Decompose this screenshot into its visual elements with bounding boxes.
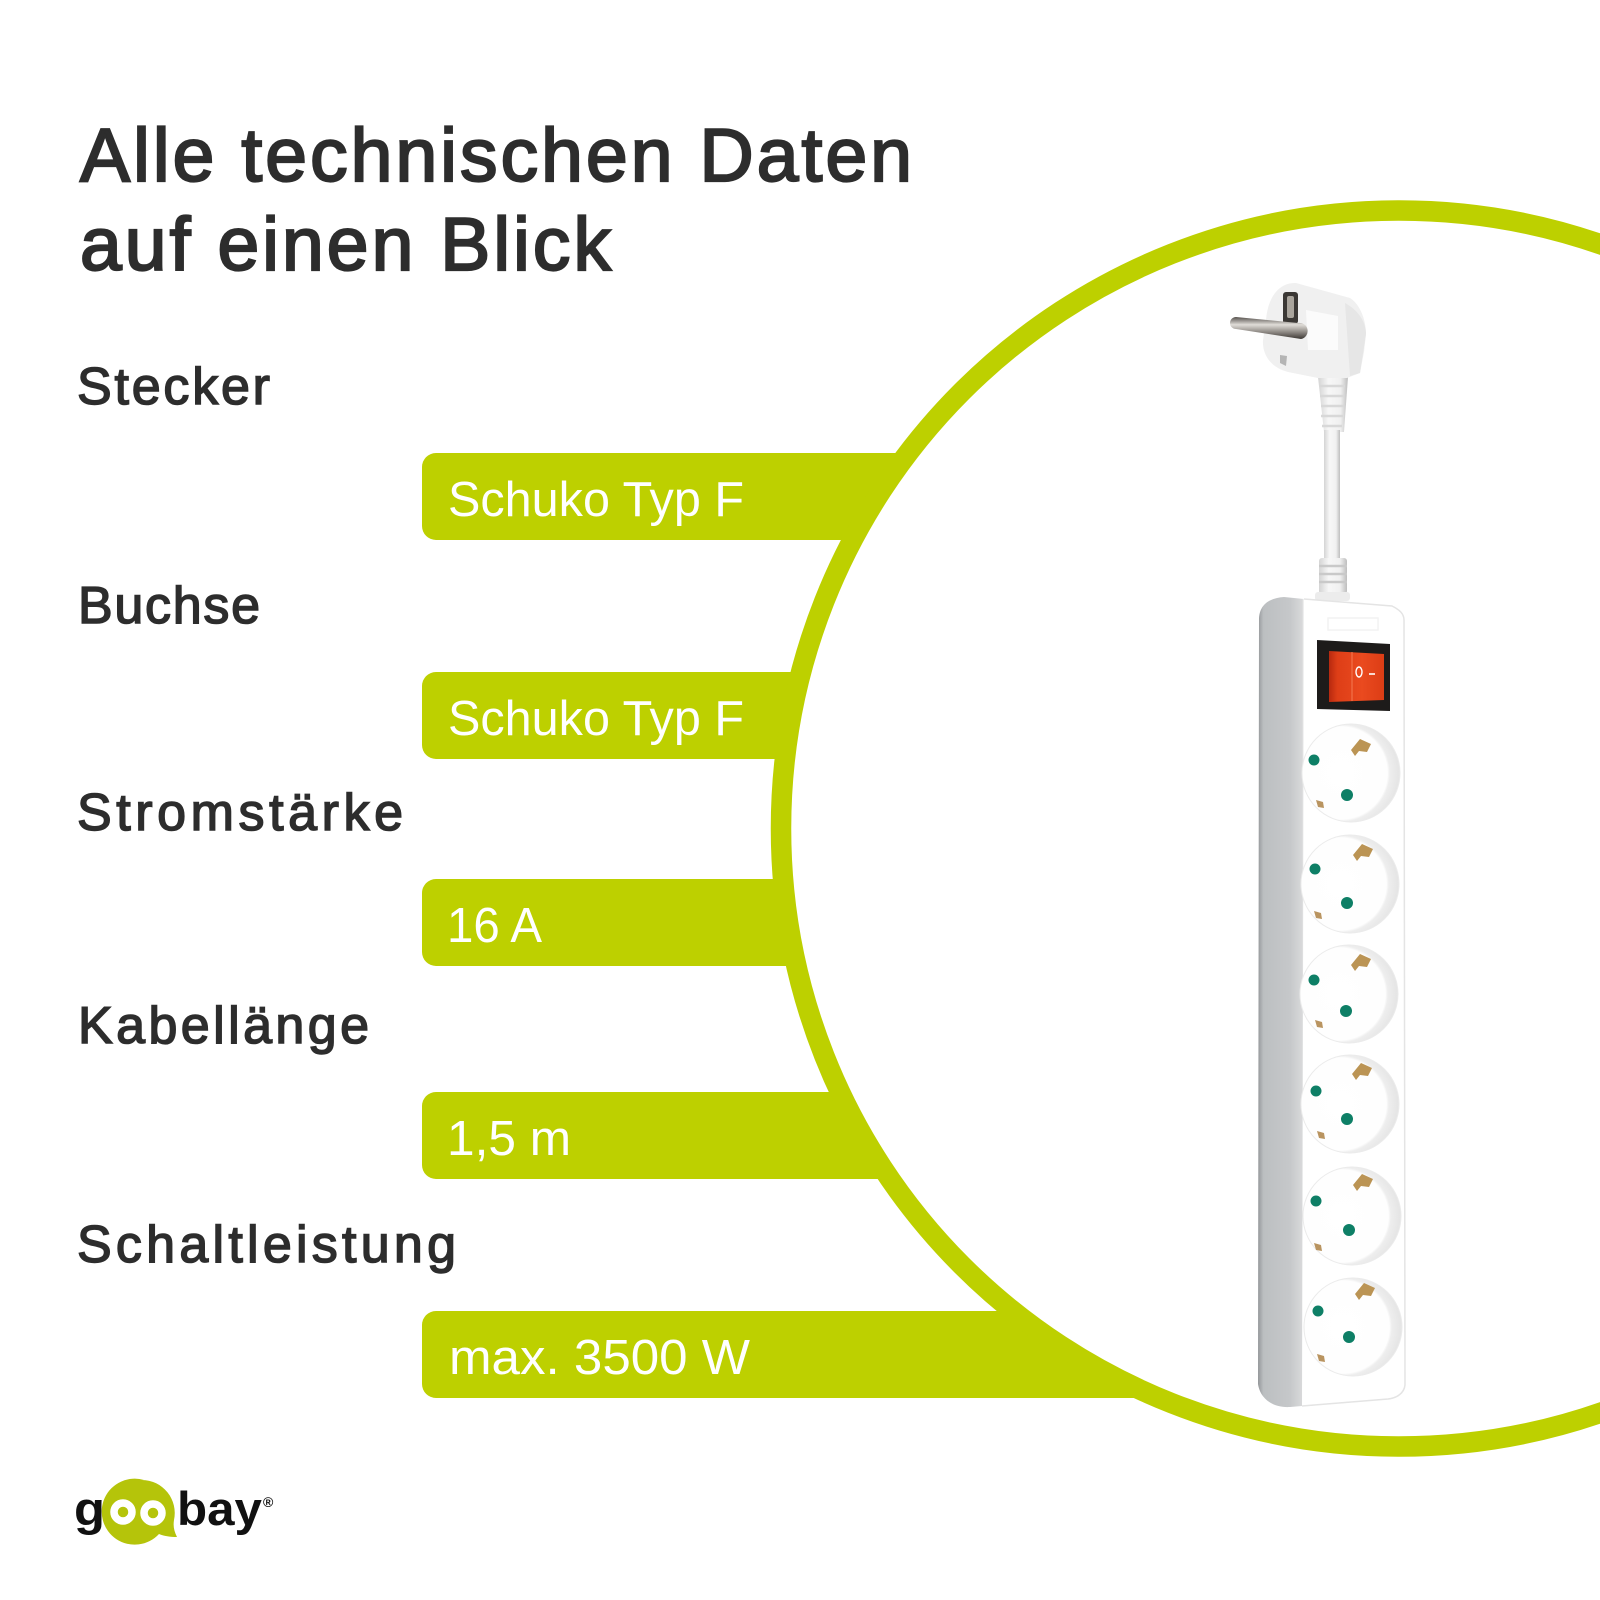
spec value: max. 3500 W: max. 3500 W xyxy=(449,1331,751,1385)
spec label: Stecker: Stecker xyxy=(77,358,270,416)
spec label: Kabellänge: Kabellänge xyxy=(78,997,369,1055)
spec value: 16 A: 16 A xyxy=(447,899,542,953)
socket 6 xyxy=(1304,1278,1402,1376)
title: Alle technischen Daten xyxy=(80,113,912,197)
logo speech bubble xyxy=(102,1479,177,1545)
cable strain relief xyxy=(1315,558,1350,601)
logo: goobay: bay xyxy=(177,1482,262,1535)
socket 2 xyxy=(1301,835,1399,933)
green ring xyxy=(781,210,1600,1446)
socket 4 xyxy=(1301,1055,1399,1153)
logo: goobay: ® xyxy=(263,1494,274,1510)
spec label: Schaltleistung: Schaltleistung xyxy=(77,1216,456,1274)
logo eyes xyxy=(114,1503,162,1522)
plug xyxy=(1230,283,1366,432)
socket 3 xyxy=(1300,945,1398,1043)
spec value: Schuko Typ F: Schuko Typ F xyxy=(448,692,744,746)
spec value: 1,5 m: 1,5 m xyxy=(447,1112,571,1166)
power strip product xyxy=(1230,283,1405,1407)
title: auf einen Blick xyxy=(80,202,612,286)
rocker switch xyxy=(1317,640,1390,711)
socket 1 xyxy=(1302,724,1400,822)
cable xyxy=(1324,430,1340,560)
strip body xyxy=(1258,597,1405,1407)
title xyxy=(80,113,912,286)
spec label: Buchse: Buchse xyxy=(78,577,260,635)
logo wordmark: g xyxy=(74,1482,105,1535)
green bars connected to ring xyxy=(422,453,1200,1398)
socket 5 xyxy=(1303,1167,1401,1265)
logo: goobay xyxy=(74,1479,274,1545)
spec label: Stromstärke: Stromstärke xyxy=(77,784,403,842)
spec value: Schuko Typ F: Schuko Typ F xyxy=(448,473,744,527)
